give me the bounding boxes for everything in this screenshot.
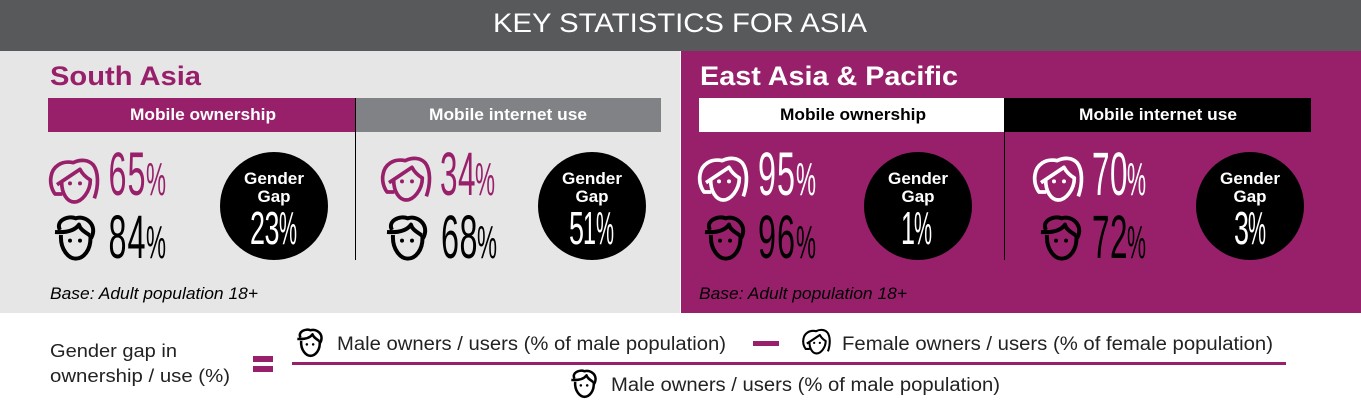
stat: female ownership 95%: 9 <box>758 140 776 208</box>
gender gap circle 1%: % <box>914 202 932 254</box>
tab: mobile internet use <box>356 98 661 132</box>
gender gap circle 51%: % <box>596 202 614 254</box>
base note: Base: Adult population 18+ <box>50 285 258 303</box>
tab: mobile ownership <box>699 98 1004 132</box>
formula label: Gender gap in <box>50 341 177 361</box>
formula label: ownership / use (%) <box>50 366 230 386</box>
panel: South Asia <box>0 51 680 313</box>
panel: East Asia & Pacific <box>681 51 1361 313</box>
icon: female ownership <box>48 158 100 204</box>
stat: female ownership 95%: 5 <box>777 140 795 208</box>
gender gap circle 51%: Gap <box>576 187 608 206</box>
formula <box>50 330 1286 397</box>
stat: female internet use 70%: 0 <box>1110 140 1128 208</box>
panel: East Asia & Pacific: % <box>1127 153 1146 205</box>
panel: South Asia: % <box>477 216 497 268</box>
gender gap circle 51% <box>538 152 646 260</box>
fraction bar <box>292 362 1286 365</box>
stat: male ownership 84%: 8 <box>108 203 126 271</box>
icon: male denominator <box>571 369 597 398</box>
stat: male internet use 68%: 6 <box>441 203 459 271</box>
gender gap circle 51%: 1 <box>583 202 596 254</box>
icon: male numerator <box>297 328 323 358</box>
panel: East Asia & Pacific: % <box>1127 216 1146 268</box>
tab: mobile internet use: Mobile internet use <box>429 105 587 124</box>
heading: East Asia & Pacific: East Asia & Pacific <box>700 61 958 91</box>
gender gap circle 1%: 1 <box>901 202 915 254</box>
icon: female internet use <box>380 156 432 202</box>
stat: female internet use 70%: 7 <box>1092 140 1110 208</box>
gender gap circle 23% <box>220 152 328 260</box>
tab: mobile ownership: Mobile ownership <box>780 105 926 124</box>
minus sign <box>753 341 779 346</box>
header band <box>0 0 1361 51</box>
heading: South Asia: South Asia <box>50 61 202 91</box>
panel: East Asia & Pacific: % <box>796 153 816 205</box>
gender gap circle 23%: % <box>279 202 297 254</box>
icon: female internet use <box>1032 156 1084 202</box>
panel: East Asia & Pacific: % <box>796 216 816 268</box>
gender gap circle 1% <box>864 152 972 260</box>
icon: male ownership <box>704 215 746 261</box>
denominator: male: Male owners / users (% of male population) <box>611 375 1000 396</box>
tab: mobile ownership <box>48 98 355 132</box>
tab: mobile internet use <box>1005 98 1311 132</box>
icon: male internet use <box>386 215 428 261</box>
stat: male ownership 84%: 4 <box>128 203 146 271</box>
panel: South Asia: % <box>475 153 495 205</box>
equals sign <box>253 356 273 372</box>
stat: male internet use 72%: 7 <box>1092 203 1110 271</box>
stat: male ownership 96%: 6 <box>777 203 795 271</box>
stat: male internet use 68%: 8 <box>460 203 478 271</box>
panel: South Asia: % <box>146 153 166 205</box>
gender gap circle 3%: 3 <box>1234 202 1249 254</box>
icon: male internet use <box>1040 215 1082 261</box>
gender gap circle 3%: % <box>1248 202 1266 254</box>
icon: female ownership <box>698 156 748 202</box>
icon: female numerator <box>802 328 831 354</box>
stat: female ownership 65%: 6 <box>108 140 126 208</box>
numerator: female: Female owners / users (% of female population) <box>842 334 1273 355</box>
tab: mobile internet use: Mobile internet use <box>1079 105 1237 124</box>
gender gap circle 51%: 5 <box>569 202 584 254</box>
tab: mobile ownership: Mobile ownership <box>130 105 276 124</box>
gender gap circle 3%: Gap <box>1234 187 1266 206</box>
numerator: male: Male owners / users (% of male population) <box>337 334 726 355</box>
gender gap circle 51%: Gender <box>562 169 622 188</box>
base note: Base: Adult population 18+ <box>699 285 907 303</box>
stat: female internet use 34%: 4 <box>458 140 476 208</box>
gender gap circle 1%: Gender <box>888 169 948 188</box>
panel: South Asia: % <box>146 216 166 268</box>
gender gap circle 23%: 3 <box>264 202 280 254</box>
gender gap circle 3% <box>1196 152 1304 260</box>
gender gap circle 1%: Gap <box>902 187 934 206</box>
gender gap circle 23%: Gap <box>258 187 290 206</box>
stat: female ownership 65%: 5 <box>128 140 146 208</box>
gender gap circle 3%: Gender <box>1220 169 1280 188</box>
icon: male ownership <box>54 215 96 261</box>
stat: female internet use 34%: 3 <box>440 140 458 208</box>
gender gap circle 23%: Gender <box>244 169 304 188</box>
title: KEY STATISTICS FOR ASIA <box>493 8 867 38</box>
stat: male internet use 72%: 2 <box>1110 203 1128 271</box>
gender gap circle 23%: 2 <box>250 202 265 254</box>
stat: male ownership 96%: 9 <box>758 203 776 271</box>
